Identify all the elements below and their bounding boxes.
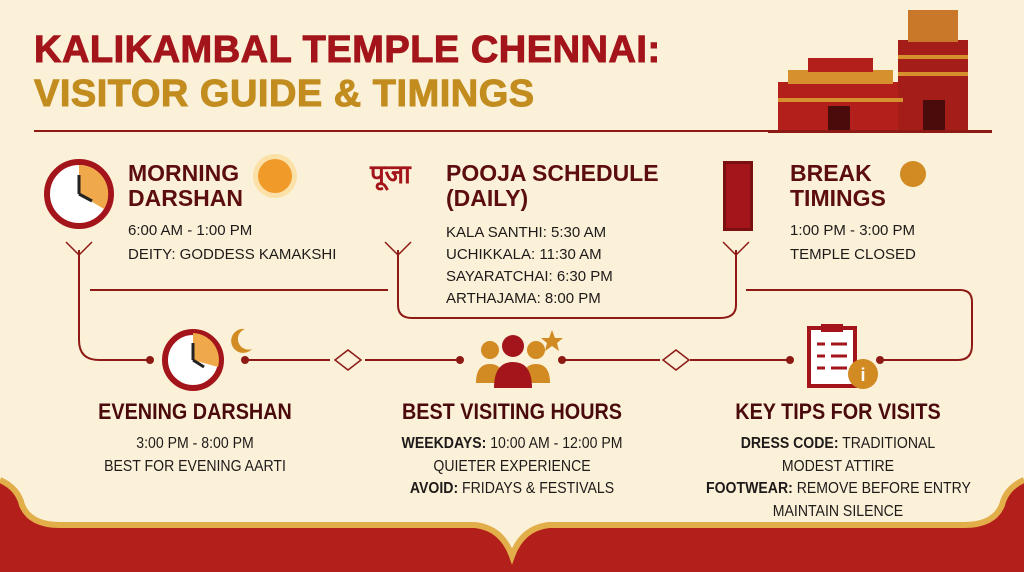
- panel: pooja schedule: KALA SANTHI: 5:30 AM: [446, 224, 606, 241]
- icon: pause: [900, 161, 926, 187]
- title: VISITOR GUIDE & TIMINGS: [34, 73, 535, 115]
- panel: break timings: BREAK: [790, 160, 872, 186]
- panel: break timings: TIMINGS: [790, 185, 886, 211]
- panel: pooja schedule: UCHIKKALA: 11:30 AM: [446, 246, 602, 263]
- panel: morning darshan: 6:00 AM - 1:00 PM: [128, 222, 252, 239]
- panel: break timings: [723, 160, 926, 263]
- panel: pooja schedule: [370, 159, 659, 307]
- icon: pooja: पूजा: [370, 159, 411, 189]
- panel: pooja schedule: SAYARATCHAI: 6:30 PM: [446, 268, 613, 285]
- icon: clipboard: i: [860, 365, 866, 385]
- panel: key tips: DRESS CODE: TRADITIONAL: [741, 435, 935, 452]
- icon: sun: [258, 159, 292, 193]
- icon: evening clock: [162, 328, 252, 391]
- panel: best visiting hours: QUIETER EXPERIENCE: [433, 458, 591, 474]
- panel: key tips: MAINTAIN SILENCE: [773, 502, 903, 520]
- panel: morning darshan: MORNING: [128, 160, 239, 186]
- panel: morning darshan: DEITY: GODDESS KAMAKSHI: [128, 246, 336, 263]
- panel: best visiting hours: WEEKDAYS: 10:00 AM - 12:00 PM: [402, 435, 622, 452]
- panel: evening darshan: EVENING DARSHAN: [98, 399, 292, 424]
- panel: break timings: TEMPLE CLOSED: [790, 246, 916, 263]
- panel: evening darshan: BEST FOR EVENING AARTI: [104, 458, 286, 474]
- title: KALIKAMBAL TEMPLE CHENNAI:: [34, 29, 661, 71]
- panel: best visiting hours: AVOID: FRIDAYS & FESTIVALS: [410, 480, 614, 497]
- panel: morning darshan: DARSHAN: [128, 185, 243, 211]
- panel: pooja schedule: (DAILY): [446, 185, 528, 211]
- panel: break timings: 1:00 PM - 3:00 PM: [790, 222, 915, 239]
- icon: door: [723, 161, 753, 231]
- panel: key tips: KEY TIPS FOR VISITS: [735, 399, 941, 424]
- icon: clipboard: [807, 324, 878, 389]
- panel: evening darshan: 3:00 PM - 8:00 PM: [136, 435, 254, 452]
- icon: temple: [768, 10, 992, 133]
- icon: clock: [44, 159, 114, 229]
- title: [34, 29, 661, 115]
- panel: key tips: [706, 399, 971, 520]
- panel: best visiting hours: BEST VISITING HOURS: [402, 399, 622, 424]
- panel: best visiting hours: [402, 399, 622, 497]
- panel: key tips: MODEST ATTIRE: [782, 458, 894, 474]
- panel: evening darshan: [98, 399, 292, 474]
- panel: pooja schedule: POOJA SCHEDULE: [446, 160, 659, 186]
- panel: key tips: FOOTWEAR: REMOVE BEFORE ENTRY: [706, 480, 971, 497]
- icon: people: [476, 330, 563, 388]
- panel: pooja schedule: ARTHAJAMA: 8:00 PM: [446, 290, 601, 307]
- panel: morning darshan: [44, 154, 336, 263]
